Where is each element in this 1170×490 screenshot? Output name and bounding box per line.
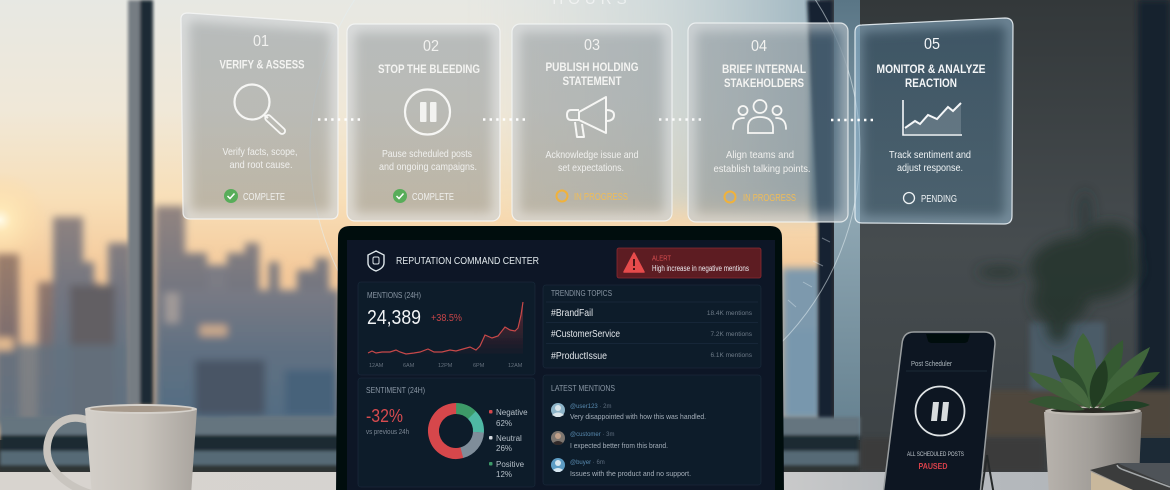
icon: magnifier [234,84,286,135]
arrow: dotted connector 4 to 5 [831,119,875,121]
panel: latest mentions: I expected better from this brand. [570,441,668,450]
panel: step 3 card: 03 [584,37,600,54]
panel: step 4 card: BRIEF INTERNAL [722,62,806,76]
panel: mentions chart: 24,389 [367,307,421,329]
panel: step 1 card: 01 [253,33,269,50]
panel: mentions chart: 6PM [473,363,485,369]
panel: step 5 card: 05 [924,36,940,53]
panel: step 4 card: Align teams and [726,149,794,161]
panel: trending topics: #CustomerService [551,328,620,340]
background: blurred city skyline [0,206,822,425]
status: in progress [724,192,796,204]
panel: trending topics: #ProductIssue [551,350,607,362]
icon: pause [405,90,450,134]
panel: step 5 card: MONITOR & ANALYZE [876,62,986,76]
phone: post scheduler: Post Scheduler [911,359,952,368]
status: pending: PENDING [921,194,957,205]
panel: mentions chart: 12AM [369,363,384,369]
icon: avatar 2 [551,431,565,445]
panel: sentiment donut: Negative [496,408,528,417]
status: complete [393,189,454,203]
panel: mentions chart [358,282,535,375]
phone: post scheduler: ALL SCHEDULED POSTS [907,451,964,458]
panel: trending topics: 6.1K mentions [710,352,753,359]
panel: sentiment donut: Neutral [496,434,522,443]
panel: step 2 card: and ongoing campaigns. [379,161,477,173]
callout: alert [617,248,761,278]
panel: trending topics [543,285,761,368]
phone: post scheduler: PAUSED [918,461,948,471]
status: in progress [556,190,628,203]
panel: step 3 card [512,24,672,221]
panel: step 4 card: STAKEHOLDERS [724,76,804,90]
panel: latest mentions: @customer · 3m [570,432,614,438]
icon: pause [916,386,964,436]
panel: latest mentions: LATEST MENTIONS [551,384,615,393]
panel: step 3 card: set expectations. [558,162,624,174]
arrow: dotted connector 1 to 2 [318,118,364,121]
arrow: dotted connector 3 to 4 [659,118,704,121]
panel: step 5 card [855,18,1013,224]
panel: sentiment donut: Positive [496,460,525,469]
panel: sentiment donut: 26% [496,444,512,453]
status: complete: COMPLETE [412,192,454,203]
icon: team [733,100,786,133]
panel: mentions chart: +38.5% [431,313,462,324]
panel: sentiment donut: 62% [496,419,512,428]
panel: step 1 card: Verify facts, scope, [222,146,298,158]
laptop dashboard [336,226,784,490]
callout: alert: ALERT [652,256,672,262]
icon: line chart [903,100,962,135]
panel: step 4 card: establish talking points. [714,163,810,175]
panel: step 4 card: 04 [751,38,767,55]
table top [0,472,1170,490]
panel: latest mentions: Issues with the product and no support. [570,469,691,478]
panel: mentions chart: 6AM [403,363,415,369]
stacked books [1090,463,1170,490]
status: complete: COMPLETE [243,192,285,203]
panel: mentions chart: MENTIONS (24H) [367,291,421,300]
panel: latest mentions [543,375,761,485]
panel: step 1 card: and root cause. [230,159,292,171]
panel: trending topics: 18.4K mentions [707,310,753,317]
panel: step 3 card: STATEMENT [562,74,622,88]
panel: step 5 card: adjust response. [897,162,963,174]
panel: sentiment donut [358,378,535,487]
window frame: vertical mullion [128,0,153,405]
panel: step 1 card [181,13,338,219]
window frame: right jamb and wall [807,0,1170,490]
heading: dashboard title: REPUTATION COMMAND CENTER [396,255,539,267]
panel: trending topics: TRENDING TOPICS [551,289,612,298]
status: in progress: IN PROGRESS [743,193,796,204]
panel: step 5 card: REACTION [905,76,957,90]
icon: megaphone [567,97,614,137]
icon: shield [368,251,384,271]
panel: mentions chart: 12PM [438,363,453,369]
potted plant [1028,333,1160,490]
panel: sentiment donut: vs previous 24h [366,427,409,436]
panel: sentiment donut: -32% [366,406,403,426]
chart: donut [424,399,488,463]
arrow: dotted connector 2 to 3 [483,118,526,121]
background: window with sunset sky [0,0,825,440]
panel: trending topics: 7.2K mentions [710,331,753,338]
panel: step 2 card [347,24,500,221]
panel: step 1 card: VERIFY & ASSESS [220,58,304,72]
panel: step 4 card [688,23,850,222]
status: pending [904,192,957,205]
background: blurred plant and pot on shelf [860,191,1170,472]
window sill [0,417,860,472]
panel: step 2 card: STOP THE BLEEDING [378,62,480,76]
panel: latest mentions: @buyer · 6m [570,460,605,466]
status: complete [224,189,285,203]
panel: step 3 card: PUBLISH HOLDING [546,60,638,74]
hud ring arc [310,0,860,425]
panel: sentiment donut: 12% [496,470,512,479]
panel: sentiment donut: SENTIMENT (24H) [366,386,425,395]
icon: avatar 1 [551,403,565,417]
callout: alert: High increase in negative mentions [652,264,749,273]
panel: latest mentions: @user123 · 2m [570,404,611,410]
panel: step 5 card: Track sentiment and [889,149,971,161]
status: in progress: IN PROGRESS [574,192,628,203]
panel: latest mentions: Very disappointed with how this was handled. [570,412,706,421]
panel: mentions chart: 12AM [508,363,523,369]
icon: avatar 3 [551,458,565,472]
phone: post scheduler [883,332,995,490]
coffee mug [47,404,197,490]
panel: step 2 card: 02 [423,38,439,55]
panel: trending topics: #BrandFail [551,307,593,319]
panel: step 2 card: Pause scheduled posts [382,148,472,160]
panel: step 3 card: Acknowledge issue and [546,149,639,161]
